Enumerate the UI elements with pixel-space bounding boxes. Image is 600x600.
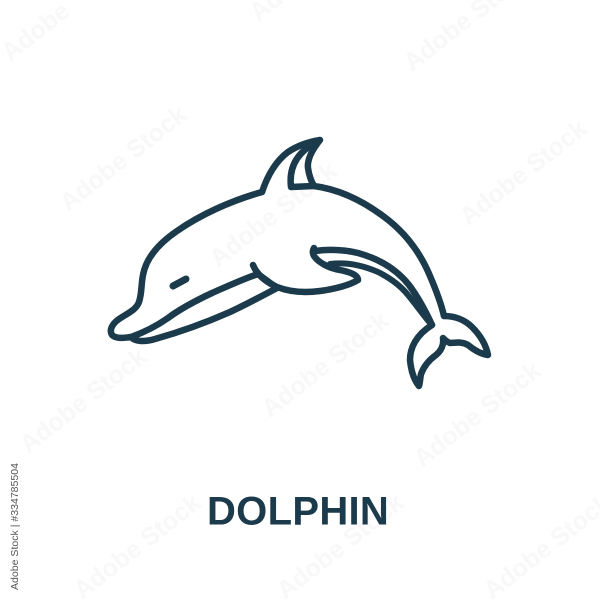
- watermark pattern: Adobe Stock: [454, 115, 592, 231]
- flipper lower line to tail: [330, 263, 432, 325]
- watermark pattern: Adobe Stock: [204, 157, 342, 273]
- stock credit: Adobe Stock | #334785504: [9, 463, 21, 590]
- watermark pattern: Adobe Stock: [14, 343, 152, 459]
- dolphin back and head outline: [262, 140, 444, 316]
- lower jaw: [131, 274, 277, 341]
- belly and flipper: [253, 248, 358, 292]
- title: DOLPHIN: [207, 490, 389, 534]
- icon: dolphin: [111, 140, 488, 386]
- watermark pattern: Adobe Stock: [408, 357, 546, 473]
- head and upper jaw: [111, 192, 262, 338]
- watermark pattern: Adobe Stock: [256, 307, 394, 423]
- flipper upper line to tail: [315, 250, 432, 325]
- dorsal fin inner line: [291, 146, 314, 187]
- tail fluke: [410, 316, 488, 386]
- watermark pattern: Adobe Stock: [54, 101, 192, 217]
- eye: [173, 279, 186, 286]
